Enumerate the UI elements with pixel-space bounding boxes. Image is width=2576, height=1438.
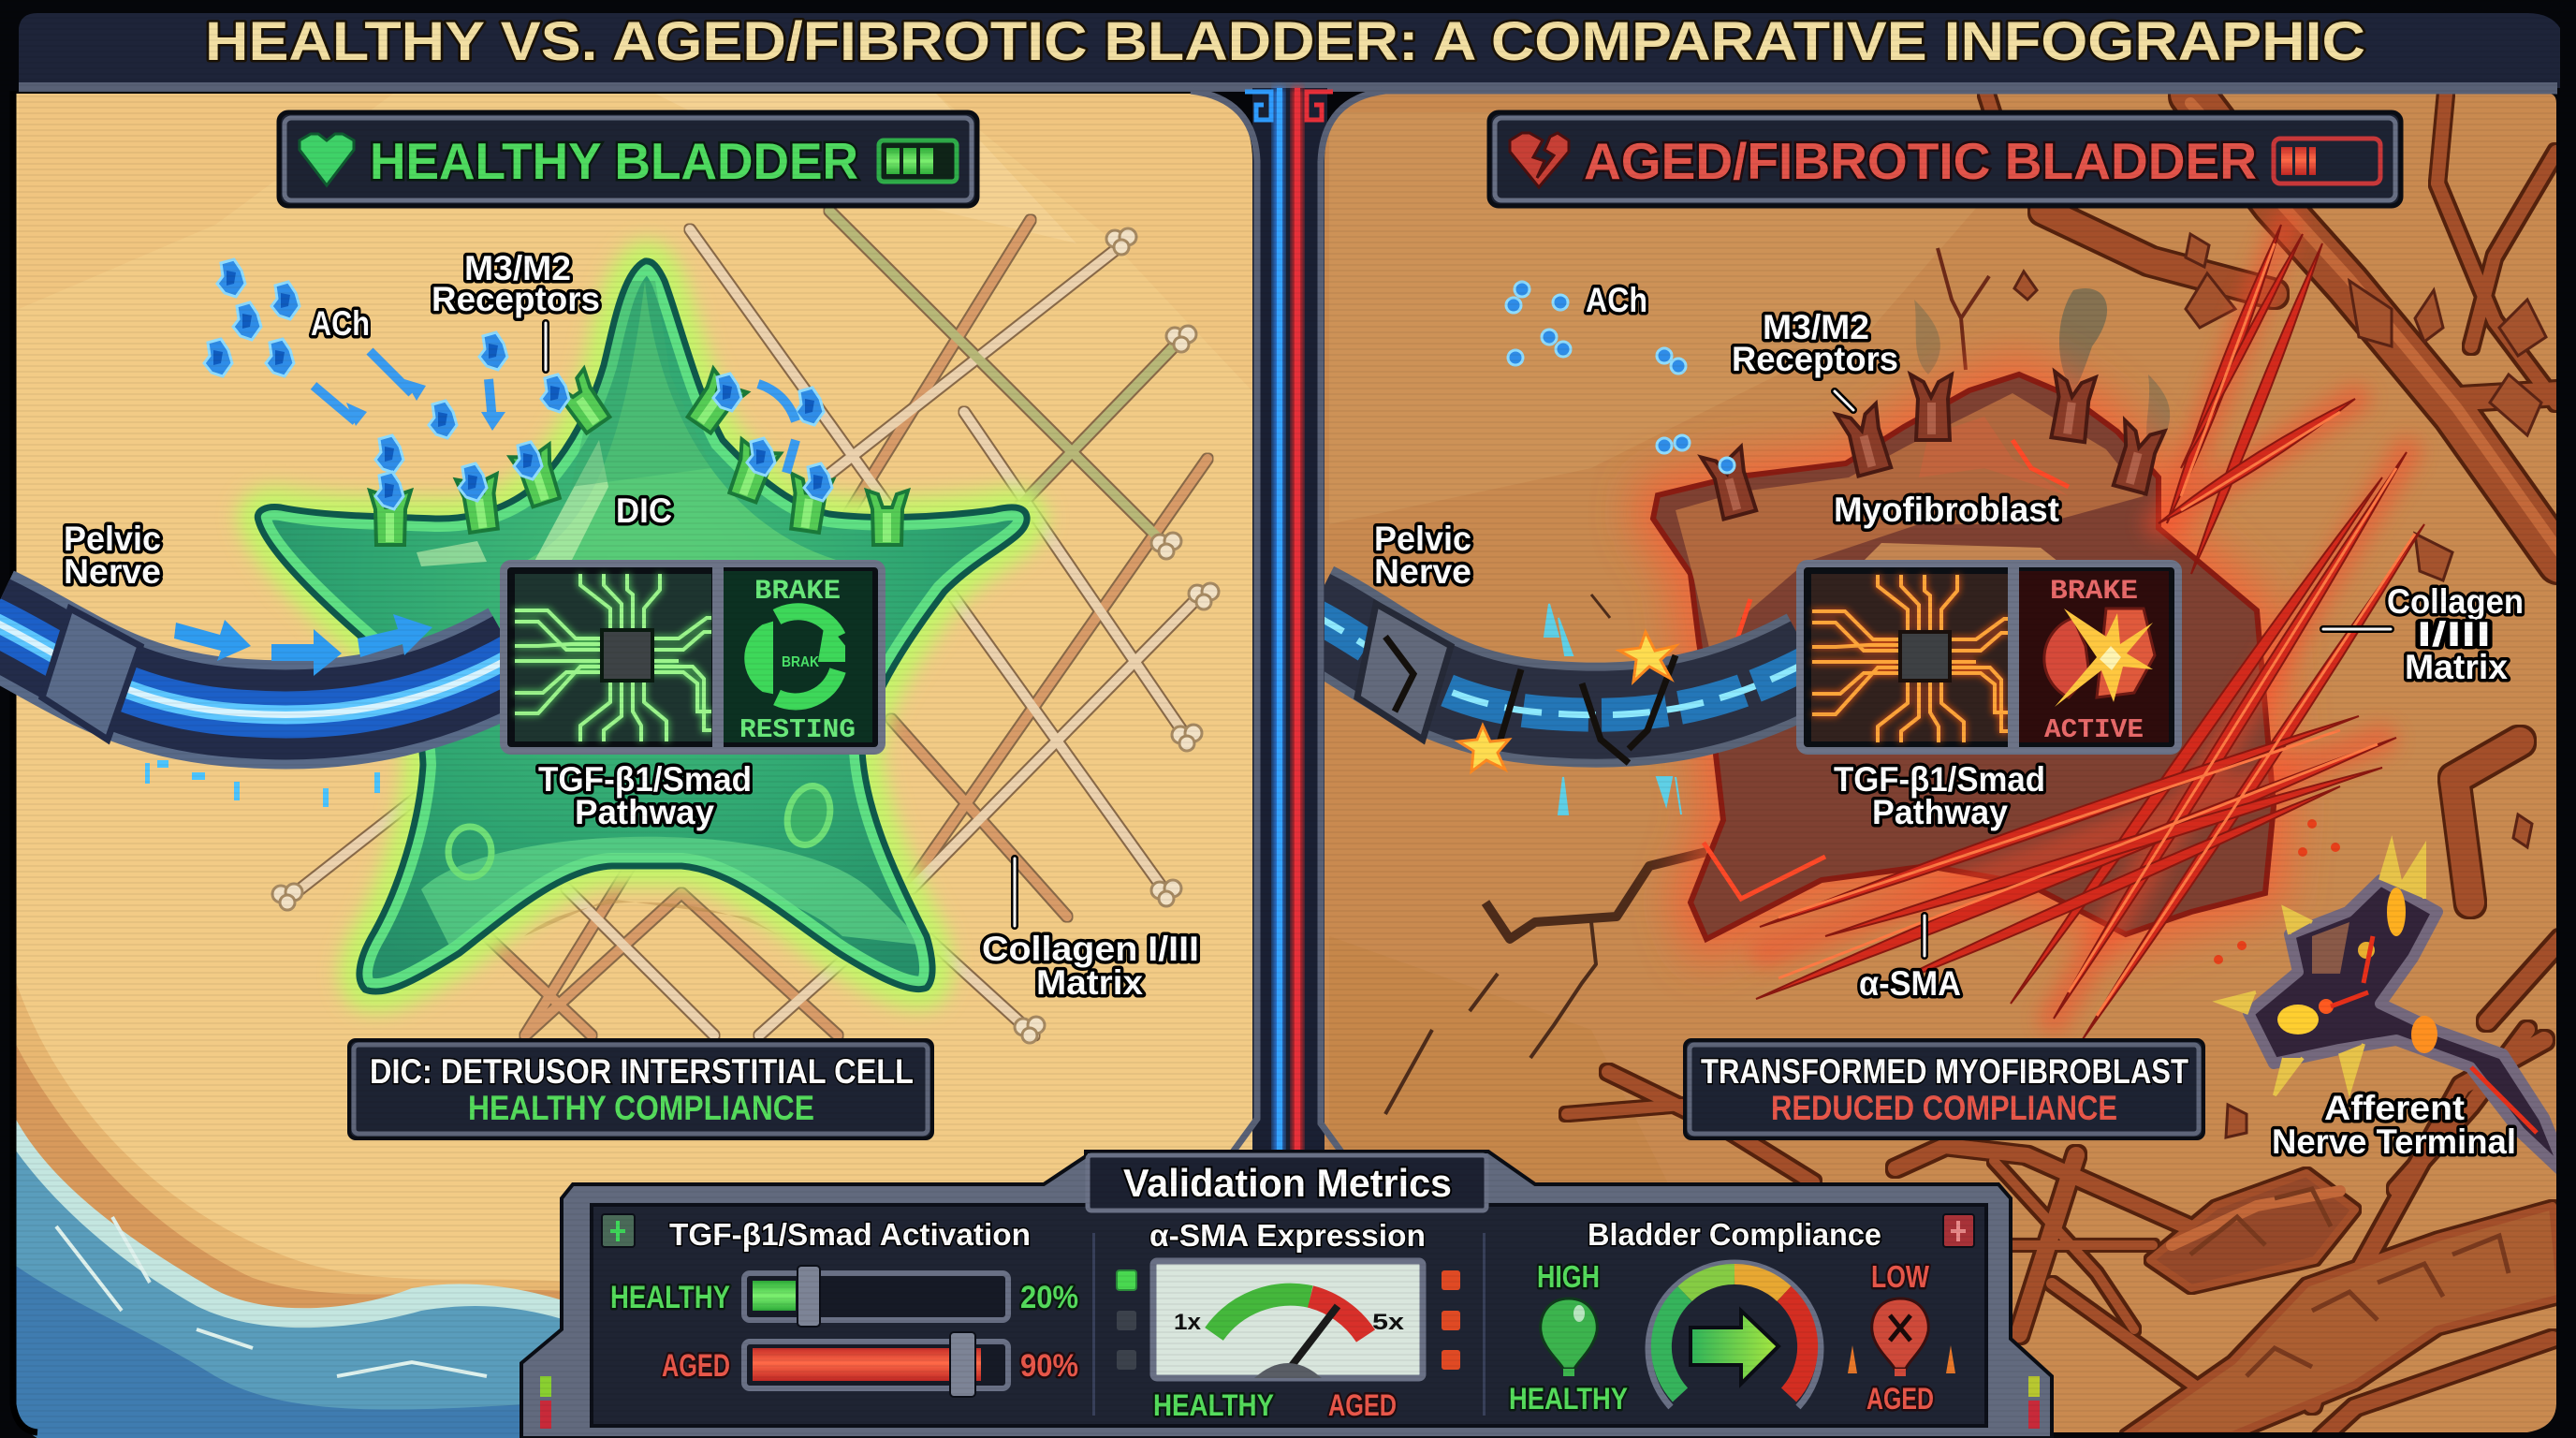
fibrotic branches <box>1567 94 2561 1438</box>
title banner: healthy <box>279 112 977 206</box>
panel: healthy bladder scene <box>13 94 1258 1438</box>
labels: healthy: Pathway <box>575 793 714 831</box>
callout: DIC healthy compliance <box>349 1040 932 1138</box>
central divider <box>1245 88 1333 1193</box>
nerve collar <box>42 609 140 740</box>
leader lines <box>546 323 2391 956</box>
labels: healthy: Pelvic <box>64 520 161 558</box>
bladder compliance metric: AGED <box>1866 1382 1934 1416</box>
TGF metric <box>602 1214 1078 1397</box>
icon: low battery <box>2274 139 2380 183</box>
collagen bone ends <box>272 228 1219 1043</box>
title bar <box>19 11 2560 92</box>
labels: healthy: Collagen I/III <box>982 930 1199 968</box>
callout: DIC healthy compliance: DIC: DETRUSOR INTERSTITIAL CELL <box>370 1052 914 1091</box>
title: HEALTHY VS. AGED/FIBROTIC BLADDER: A COMPARATIVE INFOGRAPHIC <box>205 11 2365 72</box>
labels: aged: ACh <box>1586 281 1647 319</box>
icon: green heart <box>300 134 354 185</box>
TGF metric: 20% <box>1020 1280 1078 1315</box>
bladder compliance metric: LOW <box>1871 1259 1930 1294</box>
callout: myofibroblast reduced compliance: REDUCED COMPLIANCE <box>1771 1089 2117 1127</box>
bladder compliance metric: Bladder Compliance <box>1588 1217 1881 1252</box>
bladder compliance metric: HEALTHY <box>1509 1382 1628 1416</box>
sea <box>13 1114 580 1438</box>
labels: aged <box>1374 281 2524 1161</box>
labels: aged: Nerve <box>1374 552 1471 591</box>
healthy bar <box>744 1266 1008 1327</box>
alpha-SMA metric: AGED <box>1328 1388 1397 1422</box>
circuit traces <box>1812 575 2009 742</box>
organelles <box>448 827 491 877</box>
tab header: Validation Metrics <box>1123 1161 1452 1205</box>
alpha-SMA metric: α-SMA Expression <box>1149 1218 1426 1253</box>
signal arrows <box>174 614 432 676</box>
warning marks <box>1848 1345 1955 1373</box>
myofibroblast body <box>1653 374 2274 939</box>
collagen lattice <box>290 211 1208 1035</box>
beach background <box>13 94 1258 1438</box>
labels: aged: Pelvic <box>1374 520 1471 558</box>
LEDs <box>1117 1270 1460 1370</box>
aged bar <box>744 1332 1008 1397</box>
labels: aged: Matrix <box>2405 648 2508 686</box>
TGF metric: TGF-β1/Smad Activation <box>669 1217 1031 1252</box>
chip panel: healthy <box>504 564 882 751</box>
meter gauge: 5x <box>1372 1310 1405 1335</box>
labels: healthy: DIC <box>616 492 672 530</box>
chip <box>602 630 652 681</box>
cobbled clump texture <box>2190 1189 2509 1376</box>
alpha-SMA metric: HEALTHY <box>1153 1388 1274 1422</box>
chip panel: healthy: RESTING <box>739 714 856 745</box>
cell: DIC star <box>257 261 1027 991</box>
labels: healthy: TGF-β1/Smad <box>538 760 752 799</box>
sparks <box>1458 604 1681 814</box>
callout: DIC healthy compliance: HEALTHY COMPLIANCE <box>468 1089 814 1127</box>
tab header <box>1088 1155 1486 1211</box>
alpha-SMA red fibres <box>1756 225 2424 1039</box>
afferent nerve terminal <box>2214 819 2569 1178</box>
title banner: healthy: HEALTHY BLADDER <box>370 132 858 190</box>
labels: aged: Pathway <box>1872 793 2008 831</box>
labels: healthy: Nerve <box>64 552 161 591</box>
callout: myofibroblast reduced compliance <box>1685 1040 2203 1138</box>
healthy pelvic nerve <box>0 609 515 740</box>
chip panel: aged: ACTIVE <box>2044 714 2144 745</box>
labels: healthy: ACh <box>311 304 370 343</box>
chip <box>1900 632 1950 681</box>
TGF metric: AGED <box>662 1348 730 1384</box>
panel: aged bladder scene <box>1310 94 2569 1438</box>
bladder compliance metric <box>1509 1214 1974 1416</box>
receptors healthy <box>370 369 908 545</box>
labels: aged: M3/M2 <box>1763 308 1869 346</box>
nerve cracks <box>1385 637 1676 763</box>
title banner: aged <box>1489 112 2401 206</box>
labels: aged: TGF-β1/Smad <box>1834 760 2045 799</box>
circuit traces <box>515 574 711 741</box>
rock debris <box>2014 234 2546 1137</box>
parched ground <box>1320 94 2565 1438</box>
branch highlights <box>2172 103 2560 1245</box>
labels: healthy <box>64 249 1199 1002</box>
labels: aged: Myofibroblast <box>1834 491 2059 529</box>
healthy nerve sparks <box>145 760 380 807</box>
icon: popped balloon <box>1872 1299 1928 1376</box>
brake status resting: BRAKE <box>754 576 841 608</box>
myofibroblast glow <box>1653 374 2274 939</box>
small status lights <box>540 1376 2040 1429</box>
bladder compliance metric: HIGH <box>1537 1259 1600 1294</box>
labels: healthy: M3/M2 <box>464 249 571 287</box>
ACh arrows <box>314 351 796 473</box>
aged pelvic nerve <box>1310 604 1811 763</box>
cracks in ground <box>1385 248 1989 1114</box>
alpha-SMA metric <box>1117 1218 1460 1422</box>
compliance arrow <box>1690 1311 1778 1384</box>
labels: healthy: Matrix <box>1036 963 1143 1002</box>
meter gauge <box>1153 1261 1423 1378</box>
smoke <box>1914 288 2170 459</box>
icon: green balloon <box>1541 1299 1597 1376</box>
ACh molecules aged <box>1506 282 1734 473</box>
TGF metric: HEALTHY <box>610 1280 730 1315</box>
labels: aged: Nerve Terminal <box>2272 1123 2516 1161</box>
nerve collar <box>1357 604 1451 740</box>
compliance dial <box>1648 1263 1821 1407</box>
chip panel: aged <box>1800 564 2178 751</box>
title banner: aged: AGED/FIBROTIC BLADDER <box>1584 132 2257 190</box>
labels: aged: Collagen <box>2387 582 2524 621</box>
labels: aged: α-SMA <box>1859 964 1961 1003</box>
receptors aged <box>1702 372 2165 521</box>
icon: broken heart <box>1510 133 1569 187</box>
chip panel: healthy: BRAK <box>782 654 819 670</box>
labels: aged: Receptors <box>1732 340 1898 378</box>
dark shadow under the cell <box>524 899 775 936</box>
brake status active: BRAKE <box>2050 576 2138 608</box>
labels: aged: Afferent <box>2324 1089 2465 1127</box>
labels: aged: I/III <box>2417 615 2491 653</box>
ACh molecules healthy <box>204 259 832 509</box>
labels: healthy: Receptors <box>432 280 600 318</box>
meter gauge: 1x <box>1174 1310 1202 1335</box>
callout: myofibroblast reduced compliance: TRANSFORMED MYOFIBROBLAST <box>1701 1052 2188 1091</box>
TGF metric: 90% <box>1020 1348 1078 1384</box>
panel: validation metrics <box>521 1152 2052 1438</box>
icon: full battery <box>879 140 957 182</box>
